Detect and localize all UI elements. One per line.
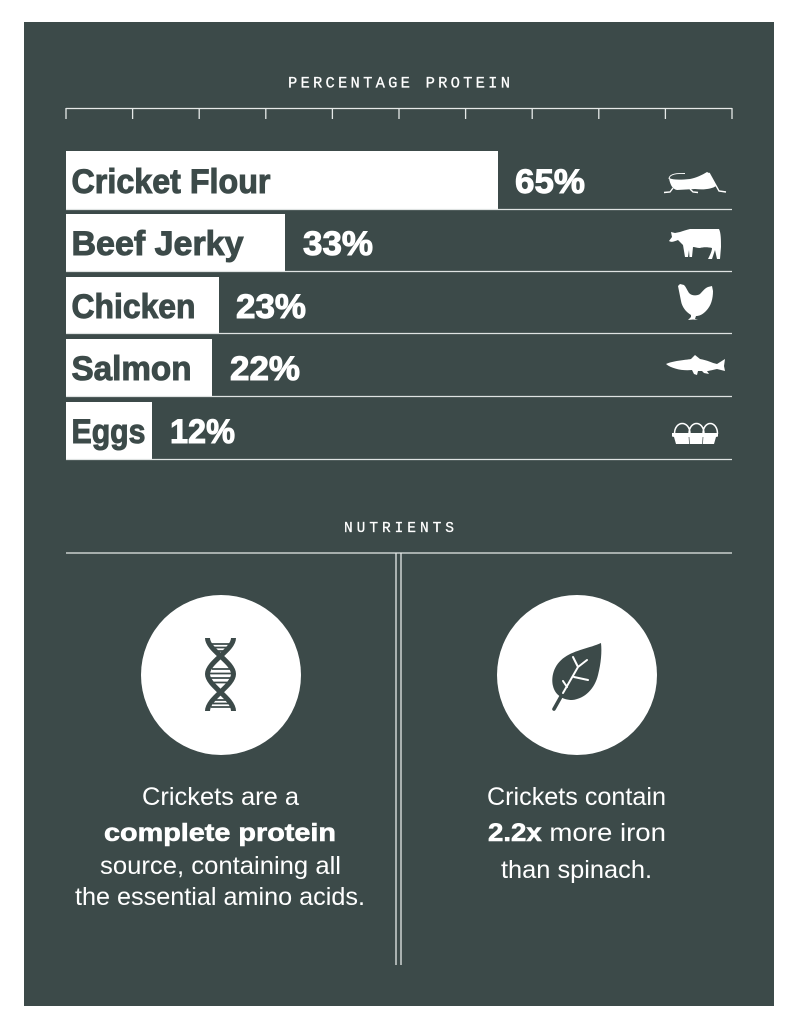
text: iron: Crickets contain [487,783,666,811]
row: salmon: 22% [230,350,300,388]
bar chart: protein by food [66,151,732,460]
heading: percentage protein: PERCENTAGE PROTEIN [288,74,510,92]
row: salmon: Salmon [72,350,192,388]
icon: chicken [678,284,713,320]
icon: leaf circle [497,595,657,755]
text: complete protein: Crickets are a [142,783,299,811]
icon: cow [669,229,721,259]
panel: iron [487,595,666,884]
row: beef jerky: 33% [303,225,373,263]
icon: dna circle [141,595,301,755]
row: beef jerky [66,214,732,272]
row: cricket flour [66,151,732,210]
row: salmon [66,339,732,396]
text: iron [487,783,666,884]
dividers [66,553,732,965]
row: beef jerky: Beef Jerky [72,225,244,263]
text: iron: 2.2x more iron [488,819,666,847]
panel: complete protein [75,595,365,911]
text: complete protein: source, containing all [100,852,341,880]
text: iron: than spinach. [501,856,652,884]
row: eggs [66,402,732,460]
text: complete protein [75,783,365,911]
row: chicken: 23% [236,288,306,326]
row: eggs: 12% [170,413,235,451]
row: chicken: Chicken [72,288,196,326]
heading: nutrients: NUTRIENTS [344,521,454,537]
icon: cricket [664,172,726,192]
row: cricket flour: 65% [515,163,585,201]
text: complete protein: the essential amino acids. [75,883,365,911]
row: chicken [66,277,732,334]
row: cricket flour: Cricket Flour [72,163,270,201]
percentage ruler [66,108,732,119]
icon: eggs [672,424,718,444]
row: eggs: Eggs [72,413,146,451]
icon: salmon [666,355,725,375]
text: complete protein: complete protein [104,819,336,847]
